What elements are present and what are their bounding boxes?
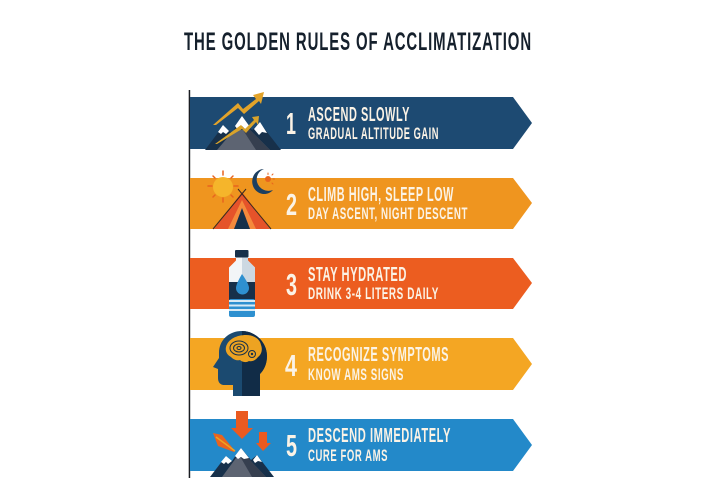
panel: rule 4 recognize symptoms (190, 331, 532, 396)
banner 1 (190, 97, 532, 149)
icon: head with brain (213, 331, 267, 396)
heading: climb high, sleep low: CLIMB HIGH, SLEEP LOW (308, 184, 454, 206)
banner 3 (190, 258, 532, 309)
timeline vertical line (189, 90, 190, 478)
subtext: know ams signs: KNOW AMS SIGNS (308, 365, 404, 384)
icon: water bottle (229, 250, 255, 317)
number 3: 3 (286, 267, 297, 302)
icon: mountain with descending arrows (210, 411, 274, 477)
number 1: 1 (286, 106, 296, 141)
banner 4 (190, 338, 532, 390)
heading: ascend slowly: ASCEND SLOWLY (308, 104, 410, 126)
heading: descend immediately: DESCEND IMMEDIATELY (308, 425, 451, 447)
icon: sun, moon and tent (208, 169, 274, 229)
icon: mountain with rising arrows (205, 92, 281, 150)
number 4: 4 (285, 348, 298, 383)
number 5: 5 (286, 428, 297, 463)
subtext: gradual altitude gain: GRADUAL ALTITUDE GAIN (308, 124, 439, 143)
banner 2 (190, 178, 532, 229)
panel: rule 2 climb high sleep low (190, 169, 532, 229)
panel: rule 5 descend immediately (190, 411, 532, 477)
heading: stay hydrated: STAY HYDRATED (308, 264, 407, 286)
heading: recognize symptoms: RECOGNIZE SYMPTOMS (308, 344, 449, 366)
subtext: drink 3-4 liters daily: DRINK 3-4 LITERS DAILY (308, 284, 439, 303)
panel: rule 1 ascend slowly (190, 92, 532, 150)
subtext: cure for ams: CURE FOR AMS (308, 446, 388, 465)
banner 5 (190, 419, 532, 471)
subtext: day ascent, night descent: DAY ASCENT, NIGHT DESCENT (308, 204, 468, 223)
number 2: 2 (286, 187, 297, 222)
panel: rule 3 stay hydrated (190, 250, 532, 317)
